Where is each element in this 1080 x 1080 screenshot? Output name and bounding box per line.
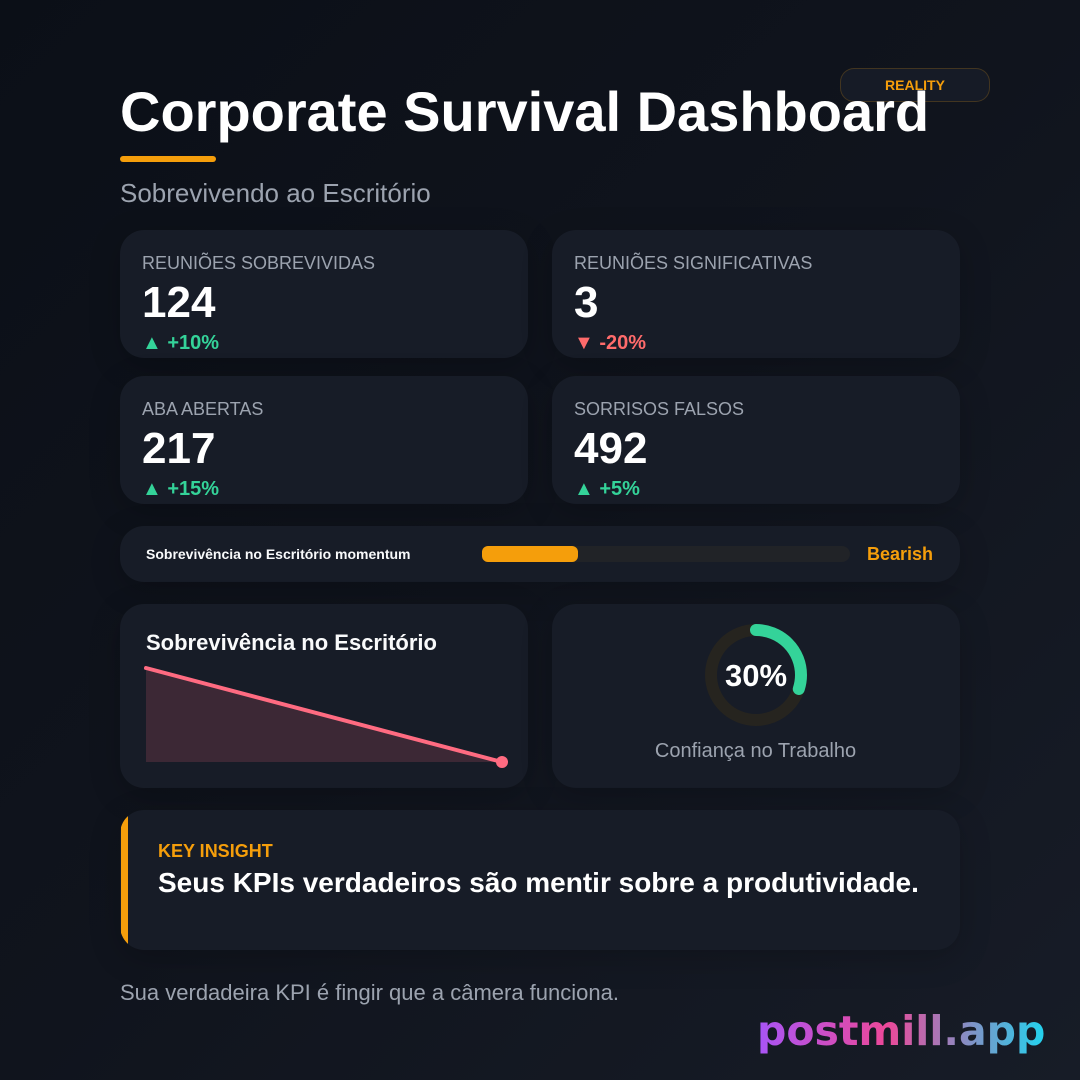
gauge value: 30% (725, 658, 787, 693)
panel: gauge (552, 604, 960, 788)
KPI label: SORRISOS FALSOS (574, 399, 744, 419)
panel: key insight (120, 810, 960, 950)
gauge label: Confiança no Trabalho (655, 740, 856, 762)
momentum fill (482, 546, 578, 562)
insight label: KEY INSIGHT (158, 841, 273, 861)
momentum label: Sobrevivência no Escritório momentum (146, 546, 411, 562)
insight text: Seus KPIs verdadeiros são mentir sobre a produtividade. (158, 867, 919, 898)
panel: KPI sorrisos falsos (552, 376, 960, 504)
badge: reality (840, 68, 990, 102)
panel: line chart (120, 604, 528, 788)
title accent underline (120, 156, 216, 162)
panel: momentum bar (120, 526, 960, 582)
KPI label: REUNIÕES SOBREVIVIDAS (142, 253, 375, 273)
KPI change: ▼ -20% (574, 332, 646, 354)
KPI change: ▲ +5% (574, 478, 640, 500)
KPI value: 3 (574, 278, 598, 327)
chart heading: Sobrevivência no Escritório (146, 630, 437, 655)
panel: KPI reuniões sobrevividas (120, 230, 528, 358)
momentum status: Bearish (867, 544, 933, 564)
title: Corporate Survival Dashboard (120, 80, 929, 143)
KPI value: 492 (574, 424, 647, 473)
line chart (144, 666, 508, 768)
footer note: Sua verdadeira KPI é fingir que a câmera funciona. (120, 980, 619, 1005)
subtitle: Sobrevivendo ao Escritório (120, 178, 431, 208)
panel: KPI aba abertas (120, 376, 528, 504)
badge: reality: REALITY (885, 77, 945, 93)
KPI value: 124 (142, 278, 215, 327)
watermark: postmill.app: postmill.app (757, 1007, 1045, 1055)
donut gauge (705, 624, 807, 726)
panel: KPI reuniões significativas (552, 230, 960, 358)
KPI label: REUNIÕES SIGNIFICATIVAS (574, 253, 812, 273)
momentum track (482, 546, 850, 562)
KPI label: ABA ABERTAS (142, 399, 263, 419)
KPI value: 217 (142, 424, 215, 473)
KPI change: ▲ +10% (142, 332, 219, 354)
insight accent bar (121, 810, 128, 950)
KPI change: ▲ +15% (142, 478, 219, 500)
